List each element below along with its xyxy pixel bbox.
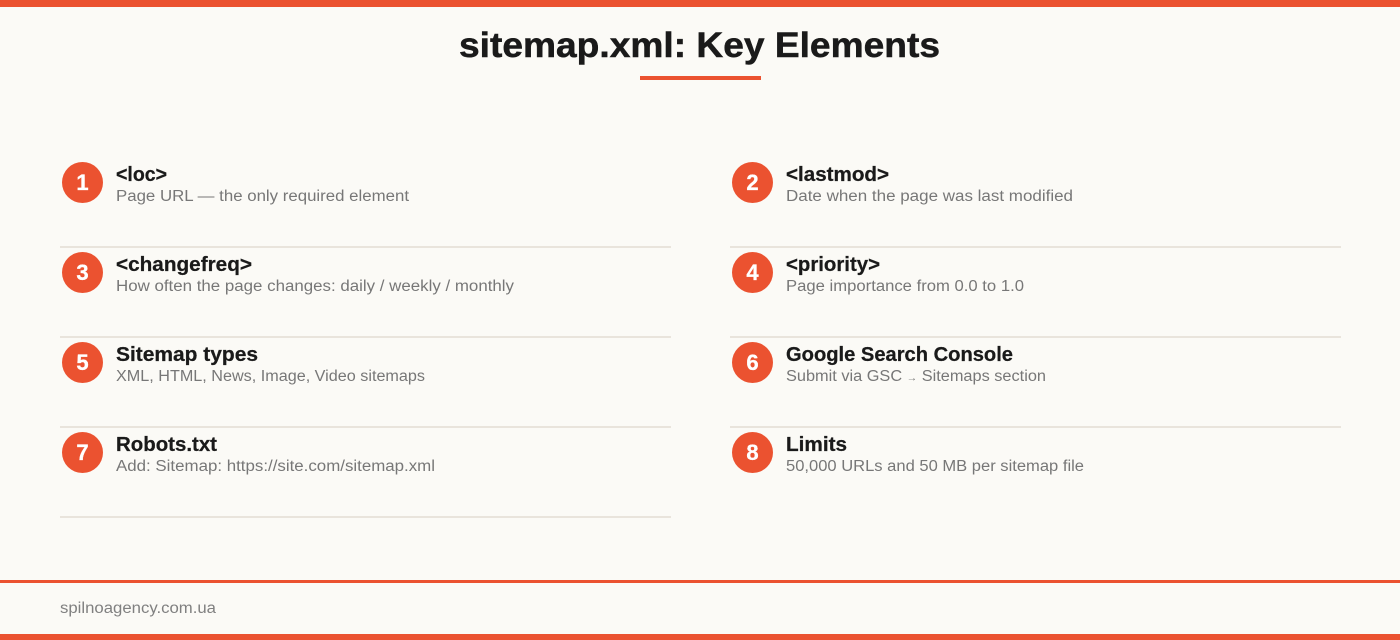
divider row 2 left bbox=[60, 336, 671, 338]
item 5: sitemap types: 5 bbox=[76, 350, 89, 375]
item 4: priority bbox=[732, 252, 1024, 295]
top accent bar bbox=[0, 0, 1400, 7]
item 4: priority: <priority> bbox=[786, 254, 880, 276]
item 4: priority: Page importance from 0.0 to 1.0 bbox=[786, 278, 1024, 295]
item 1: loc: Page URL — the only required element bbox=[116, 188, 410, 205]
divider row 2 right bbox=[730, 336, 1341, 338]
item 7: robots.txt: 7 bbox=[76, 440, 89, 465]
item 2: lastmod bbox=[732, 162, 1073, 205]
divider row 1 right bbox=[730, 246, 1341, 248]
item 5: sitemap types: Sitemap types bbox=[116, 344, 258, 366]
item 6: google search console: Submit via GSC → Sitemaps section bbox=[786, 368, 1046, 385]
item 3: changefreq bbox=[62, 252, 514, 295]
item 2: lastmod: Date when the page was last modified bbox=[786, 188, 1073, 205]
item 1: loc: <loc> bbox=[116, 164, 167, 186]
item 5: sitemap types bbox=[62, 342, 425, 385]
item 8: limits: 8 bbox=[746, 440, 759, 465]
item 1: loc: 1 bbox=[76, 170, 89, 195]
item 8: limits bbox=[732, 432, 1084, 475]
item 2: lastmod: <lastmod> bbox=[786, 164, 889, 186]
footer text: spilnoagency.com.ua bbox=[60, 600, 216, 617]
item 5: sitemap types: XML, HTML, News, Image, Video sitemaps bbox=[116, 368, 425, 385]
title underline bbox=[640, 76, 761, 80]
item 2: lastmod: 2 bbox=[746, 170, 759, 195]
item 8: limits: Limits bbox=[786, 434, 847, 456]
item 3: changefreq: 3 bbox=[76, 260, 89, 285]
divider row 3 left bbox=[60, 426, 671, 428]
divider row 1 left bbox=[60, 246, 671, 248]
item 8: limits: 50,000 URLs and 50 MB per sitemap file bbox=[786, 458, 1084, 475]
item 6: google search console: 6 bbox=[746, 350, 759, 375]
item 1: loc bbox=[62, 162, 410, 205]
item 4: priority: 4 bbox=[746, 260, 759, 285]
bottom accent bar bbox=[0, 634, 1400, 640]
item 7: robots.txt: Robots.txt bbox=[116, 434, 217, 456]
item 3: changefreq: <changefreq> bbox=[116, 254, 252, 276]
item 7: robots.txt bbox=[62, 432, 435, 475]
title: sitemap.xml: Key Elements bbox=[459, 26, 940, 65]
footer rule bbox=[0, 580, 1400, 583]
item 7: robots.txt: Add: Sitemap: https://site.com/sitemap.xml bbox=[116, 458, 435, 475]
item 6: google search console: Google Search Console bbox=[786, 344, 1013, 366]
divider row 4 left bbox=[60, 516, 671, 518]
item 6: google search console bbox=[732, 342, 1046, 385]
divider row 3 right bbox=[730, 426, 1341, 428]
item 3: changefreq: How often the page changes: daily / weekly / monthly bbox=[116, 278, 514, 295]
